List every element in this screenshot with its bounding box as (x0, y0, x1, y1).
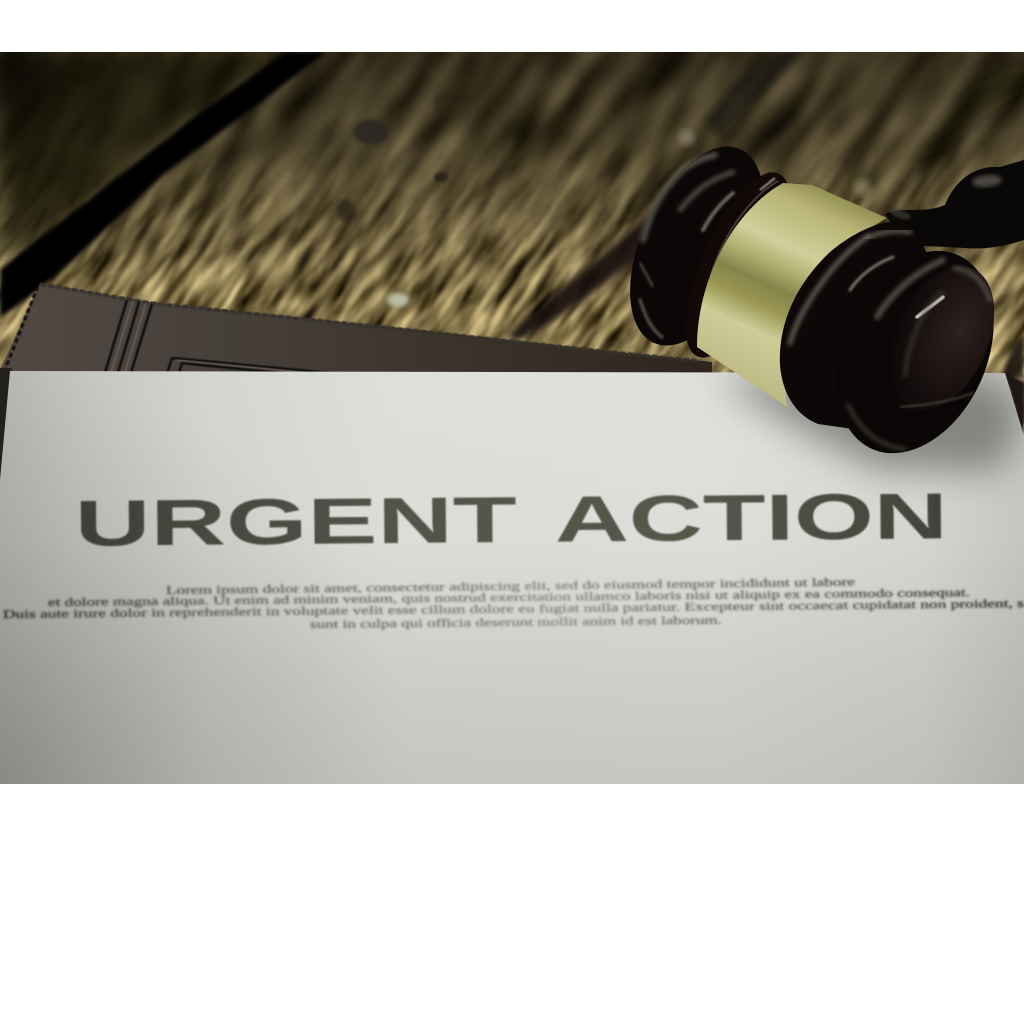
paper lower left falloff (0, 505, 294, 784)
book stitched edge (40, 284, 700, 361)
body line 2: et dolore magna aliqua. Ut enim ad minim veniam, quis nostrud exercitation ullamco laboris nisi ut aliquip ex ea commodo consequat. (48, 587, 970, 609)
book corner panel lines (104, 300, 152, 376)
photo frame (0, 52, 1024, 784)
paper sheet (0, 365, 1024, 785)
dark edge beside paper (1005, 373, 1024, 440)
wood knots (353, 119, 389, 145)
gavel brass band (697, 183, 887, 407)
body line 1: Lorem ipsum dolor sit amet, consectetur adipiscing elit, sed do eiusmod tempor incididunt ut labore (166, 577, 855, 597)
gavel left collar (687, 172, 787, 358)
plank gap centre (505, 190, 668, 340)
heading word: action: ACTION (554, 479, 948, 556)
plank gap left (0, 52, 326, 318)
sharper wood grain near book (0, 142, 1024, 424)
gavel (630, 146, 1024, 454)
overall wood shading (0, 52, 1024, 246)
gavel handle (885, 160, 1024, 249)
body line 4: sunt in culpa qui officia deserunt mollit anim id est laborum. (310, 615, 722, 631)
gavel right head (845, 250, 994, 454)
plank gap right (905, 60, 1024, 165)
gavel left head (630, 146, 788, 350)
heading word: urgent: URGENT (75, 483, 517, 560)
heading: urgent action (80, 492, 942, 547)
book inner frame (166, 356, 330, 372)
soft out-of-focus wood grain (0, 52, 1024, 480)
gavel shadow on paper (715, 375, 1024, 470)
leather book (1, 282, 712, 372)
gavel right collar (780, 222, 926, 428)
body text block (3, 577, 1024, 631)
wooden table background (0, 52, 1024, 480)
shadowed left plank (0, 52, 286, 269)
photo illustration (0, 52, 1024, 784)
body line 3: Duis aute irure dolor in reprehenderit in voluptate velit esse cillum dolore eu fugiat nulla pariatur. Excepteur sint occaecat cupidatat non proident, s (3, 598, 1024, 621)
